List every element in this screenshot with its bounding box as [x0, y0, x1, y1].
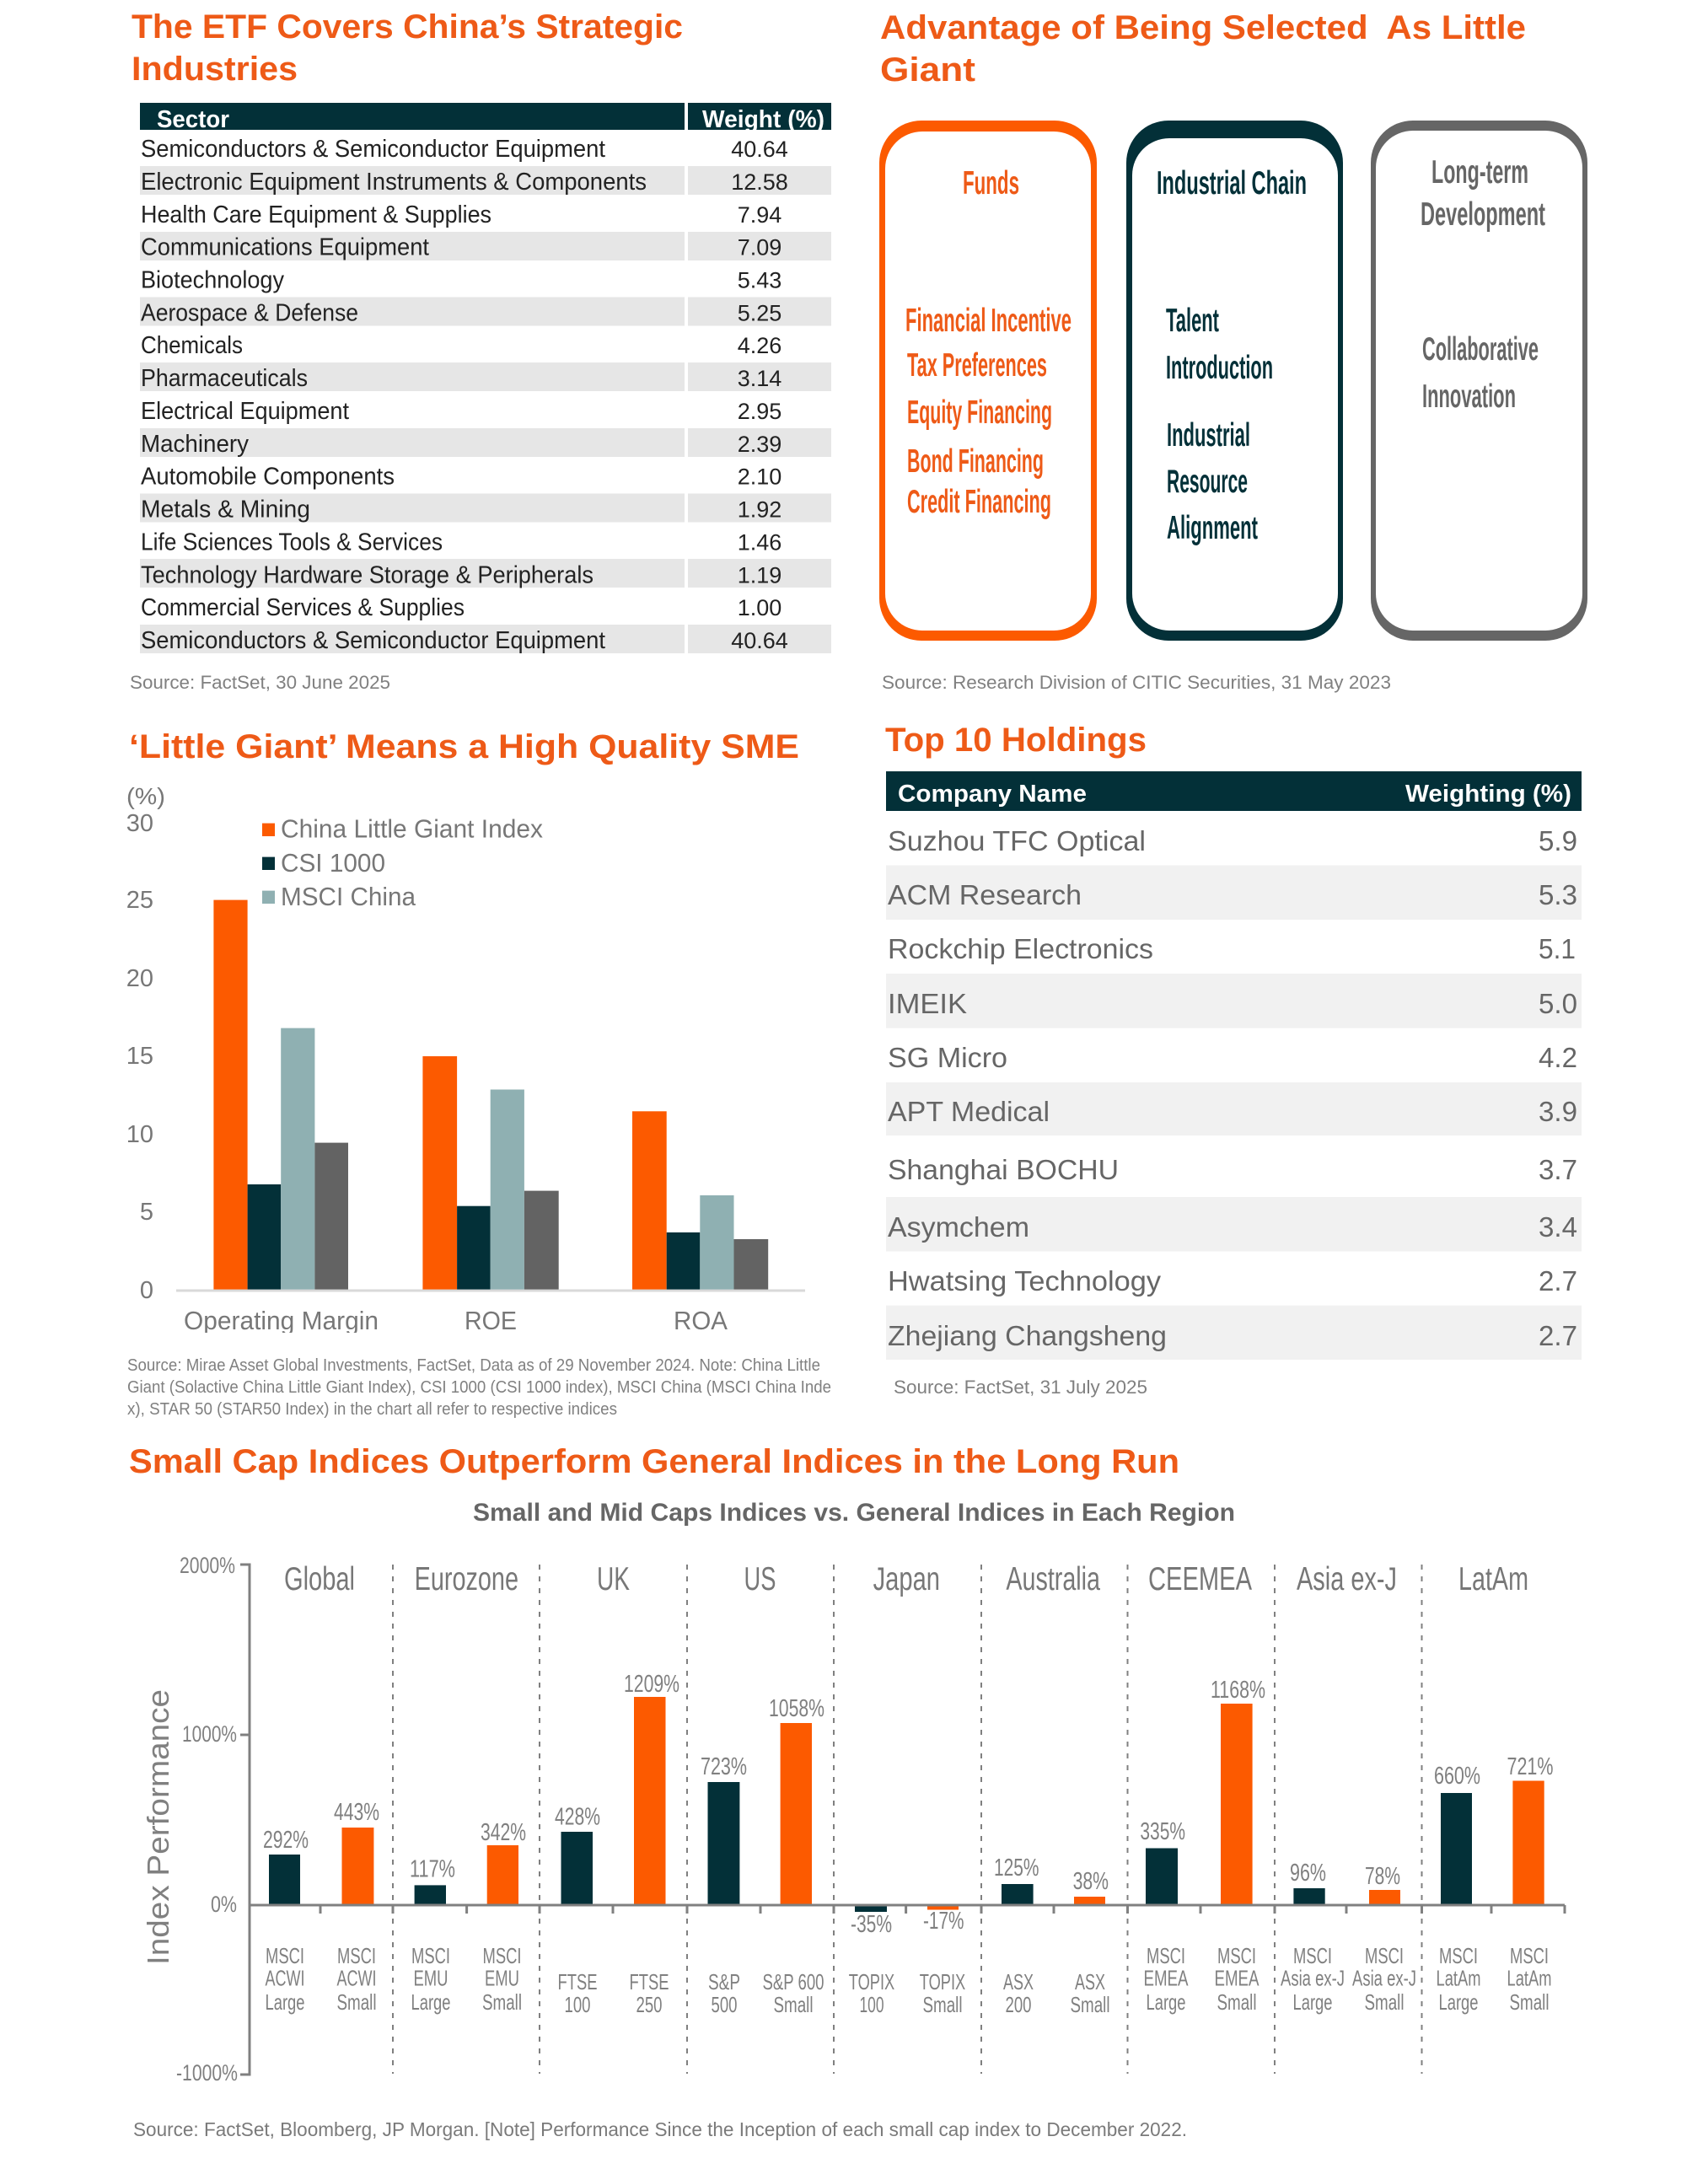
heading: small cap indices outperform: Small Cap Indices Outperform General Indices in the Long Run — [129, 1443, 1179, 1480]
table: holdings: Zhejiang Changsheng — [888, 1320, 1167, 1351]
value labels: 723% — [701, 1753, 747, 1780]
bar chart: margin, ROE, ROA: 30 — [126, 810, 153, 837]
index category labels: FTSE — [629, 1969, 669, 1994]
index category labels: MSCI — [1147, 1943, 1185, 1968]
heading: ETF covers strategic industries — [132, 8, 683, 88]
index category labels: LatAm — [1507, 1966, 1551, 1991]
table: sector weights: Sector — [157, 106, 229, 133]
card: long-term development: Collaborative — [1422, 331, 1539, 368]
table: holdings: Asymchem — [888, 1211, 1029, 1243]
index category labels: EMEA — [1143, 1966, 1189, 1991]
table: holdings: Shanghai BOCHU — [888, 1154, 1119, 1185]
index category labels: Small — [774, 1992, 813, 2017]
index category labels: MSCI — [266, 1943, 304, 1968]
region labels: CEEMEA — [1148, 1561, 1252, 1597]
table: holdings: 3.7 — [1539, 1154, 1577, 1185]
table: sector weights: 1.46 — [738, 529, 781, 555]
table: sector weights: Aerospace & Defense — [141, 299, 358, 326]
table: sector weights: Communications Equipment — [141, 234, 429, 261]
value labels: 1168% — [1211, 1677, 1265, 1704]
panel: sector weights — [130, 8, 831, 693]
card: funds: Equity Financing — [907, 395, 1052, 431]
index category labels: EMEA — [1214, 1966, 1260, 1991]
table: holdings: Weighting (%) — [1405, 781, 1571, 808]
table: sector weights: Commercial Services & Supplies — [141, 594, 465, 621]
value labels: -17% — [923, 1908, 964, 1935]
card: funds: Bond Financing — [907, 443, 1044, 480]
region labels: Global — [284, 1561, 355, 1597]
value labels: 125% — [994, 1855, 1039, 1882]
table: sector weights: Electronic Equipment Instruments & Components — [141, 169, 647, 196]
value labels: 117% — [410, 1856, 455, 1883]
table: sector weights: Automobile Components — [141, 464, 395, 491]
bar chart: margin, ROE, ROA: 0 — [140, 1277, 153, 1304]
index category labels: 250 — [636, 1992, 663, 2017]
table: holdings: Company Name — [898, 781, 1087, 808]
table: sector weights: Technology Hardware Storage & Peripherals — [141, 561, 594, 588]
table: holdings: 2.7 — [1539, 1320, 1577, 1351]
index category labels: ASX — [1003, 1969, 1034, 1994]
table: sector weights: 1.19 — [738, 562, 781, 588]
table: holdings: ACM Research — [888, 879, 1082, 910]
card: long-term development: Innovation — [1422, 378, 1516, 415]
legend — [262, 814, 543, 911]
chart subtitle: Small and Mid Caps Indices vs. General Indices in Each Region — [473, 1499, 1235, 1527]
index category labels: MSCI — [1217, 1943, 1256, 1968]
table: holdings: IMEIK — [888, 988, 967, 1019]
region labels: Australia — [1006, 1561, 1100, 1597]
index category labels: MSCI — [1439, 1943, 1478, 1968]
table: sector weights: 40.64 — [731, 137, 788, 162]
heading: advantage of being selected: Giant — [880, 51, 975, 89]
table: holdings: 3.9 — [1539, 1096, 1577, 1127]
value labels — [263, 1671, 1553, 1938]
region labels: US — [744, 1561, 776, 1597]
region labels: Eurozone — [415, 1561, 518, 1597]
table: sector weights — [140, 103, 831, 654]
source note: SME chart — [127, 1356, 831, 1419]
zero axis — [250, 1905, 1565, 1914]
region labels: Asia ex-J — [1297, 1561, 1397, 1597]
table: sector weights: 3.14 — [738, 366, 781, 391]
table: holdings — [886, 771, 1582, 1360]
index category labels: Small — [1217, 1989, 1256, 2015]
bar chart: margin, ROE, ROA: ROE — [465, 1306, 517, 1335]
index category labels: Asia ex-J — [1281, 1966, 1345, 1991]
index category labels: ACWI — [337, 1966, 376, 1991]
card: funds: Financial Incentive — [905, 303, 1072, 339]
value labels: 96% — [1290, 1860, 1326, 1887]
index category labels: Large — [1438, 1989, 1479, 2015]
heading: top 10 holdings: Top 10 Holdings — [885, 722, 1147, 759]
value labels: 1209% — [624, 1671, 679, 1698]
index category labels: Large — [1147, 1989, 1185, 2015]
index category labels: S&P 600 — [762, 1969, 824, 1994]
table: sector weights: Health Care Equipment & Supplies — [141, 201, 491, 228]
table: holdings: Rockchip Electronics — [888, 933, 1153, 964]
heading: ETF covers strategic industries: Industries — [132, 51, 298, 88]
table: holdings: SG Micro — [888, 1042, 1007, 1073]
table: sector weights: Machinery — [141, 431, 249, 458]
index category labels: 100 — [860, 1992, 884, 2017]
heading: advantage of being selected — [880, 9, 1526, 89]
card: long-term development: Long-term — [1431, 154, 1528, 191]
value labels: 721% — [1507, 1753, 1553, 1780]
index category labels: Large — [411, 1989, 450, 2015]
value labels: 38% — [1073, 1868, 1109, 1895]
index category labels: MSCI — [337, 1943, 376, 1968]
bar chart: margin, ROE, ROA: (%) — [126, 783, 165, 809]
table: sector weights: 12.58 — [731, 169, 788, 195]
panel: high quality SME chart — [126, 728, 831, 1419]
table: sector weights: 1.00 — [738, 595, 781, 620]
card: industrial chain: Industrial Chain — [1157, 165, 1307, 201]
table: holdings: 2.7 — [1539, 1265, 1577, 1296]
value labels: 292% — [263, 1827, 309, 1854]
source note: sector table: Source: FactSet, 30 June 2025 — [130, 672, 390, 693]
y axis: 2000% — [180, 1553, 235, 1578]
value labels: 1058% — [769, 1695, 824, 1722]
index category labels: TOPIX — [920, 1969, 965, 1994]
table: sector weights: Semiconductors & Semiconductor Equipment — [141, 627, 605, 654]
y axis: Index Performance — [141, 1689, 175, 1965]
table: holdings: Hwatsing Technology — [888, 1265, 1162, 1296]
table: sector weights: Life Sciences Tools & Services — [141, 529, 443, 556]
table: holdings: 5.0 — [1539, 988, 1577, 1019]
table: sector weights: Semiconductors & Semiconductor Equipment — [141, 136, 605, 163]
y axis — [141, 1553, 250, 2086]
value labels: 335% — [1140, 1818, 1185, 1845]
region labels: Japan — [873, 1561, 940, 1597]
table: sector weights: Weight (%) — [702, 106, 824, 133]
index category labels: 200 — [1005, 1992, 1032, 2017]
table: sector weights: 5.43 — [738, 268, 781, 293]
index category labels: LatAm — [1437, 1966, 1480, 1991]
heading: little giant means high quality SME: ‘Little Giant’ Means a High Quality SME — [129, 728, 799, 765]
table: sector weights: Pharmaceuticals — [141, 365, 308, 392]
card: long-term development — [1371, 121, 1587, 641]
index category labels: 100 — [565, 1992, 590, 2017]
table: sector weights: 5.25 — [738, 300, 781, 325]
y axis: 0% — [211, 1892, 237, 1917]
table: sector weights: 2.10 — [738, 464, 781, 490]
value labels: 660% — [1434, 1763, 1480, 1790]
bar chart: margin, ROE, ROA: 20 — [126, 965, 153, 992]
index category labels: MSCI — [1510, 1943, 1549, 1968]
index category labels: EMU — [485, 1966, 519, 1991]
region labels: UK — [597, 1561, 630, 1597]
bar chart: margin, ROE, ROA: 5 — [140, 1199, 153, 1226]
index category labels — [265, 1943, 1551, 2017]
region labels — [284, 1561, 1528, 1597]
panel: small cap outperformance — [129, 1443, 1565, 2140]
table: sector weights: Chemicals — [141, 332, 243, 359]
table: sector weights: Biotechnology — [141, 266, 284, 293]
card: industrial chain: Introduction — [1166, 350, 1273, 386]
table: sector weights: 4.26 — [738, 333, 781, 358]
card: industrial chain: Industrial — [1167, 417, 1250, 454]
y axis: -1000% — [176, 2060, 238, 2086]
source note: SME chart: x), STAR 50 (STAR50 Index) in the chart all refer to respective indices — [127, 1400, 617, 1419]
y axis: 1000% — [182, 1721, 237, 1747]
value labels: 78% — [1365, 1863, 1400, 1890]
card: funds — [879, 121, 1097, 641]
index category labels: MSCI — [1293, 1943, 1332, 1968]
table: sector weights: 7.09 — [738, 235, 781, 260]
legend: China Little Giant Index — [281, 814, 543, 844]
value labels: 342% — [481, 1819, 526, 1846]
index category labels: MSCI — [1365, 1943, 1404, 1968]
index category labels: Small — [1364, 1989, 1405, 2015]
legend: MSCI China — [281, 882, 416, 911]
index category labels: Asia ex-J — [1352, 1966, 1416, 1991]
source note: small cap chart: Source: FactSet, Bloomberg, JP Morgan. [Note] Performance Since the Inception of each small cap index to December 2022. — [133, 2118, 1187, 2140]
table: sector weights: Electrical Equipment — [141, 398, 349, 425]
index category labels: Small — [1071, 1992, 1109, 2017]
index category labels: MSCI — [411, 1943, 450, 1968]
card: industrial chain — [1126, 121, 1343, 641]
bar chart: margin, ROE, ROA — [126, 783, 805, 1341]
index category labels: FTSE — [558, 1969, 597, 1994]
bar chart: margin, ROE, ROA: 25 — [126, 887, 153, 914]
card: industrial chain: Talent — [1166, 303, 1219, 339]
source note: advantage panel: Source: Research Division of CITIC Securities, 31 May 2023 — [882, 672, 1391, 693]
index category labels: ASX — [1075, 1969, 1105, 1994]
bars — [269, 1697, 1544, 1912]
panel: top 10 holdings — [885, 722, 1582, 1398]
panel: advantage of little giant — [879, 9, 1587, 693]
value labels: 428% — [555, 1804, 600, 1831]
table: holdings: 5.9 — [1539, 825, 1577, 856]
table: holdings: 5.3 — [1539, 879, 1577, 910]
table: holdings: 3.4 — [1539, 1211, 1577, 1243]
table: holdings: Suzhou TFC Optical — [888, 825, 1146, 856]
region labels: LatAm — [1458, 1561, 1528, 1597]
table: sector weights: Metals & Mining — [141, 496, 310, 523]
source note: holdings: Source: FactSet, 31 July 2025 — [894, 1377, 1147, 1398]
table: sector weights: 7.94 — [738, 202, 781, 228]
bar chart: margin, ROE, ROA: Operating Margin — [184, 1306, 379, 1335]
bar chart: margin, ROE, ROA: 15 — [126, 1043, 153, 1070]
heading: advantage of being selected: Advantage of Being Selected As Little — [880, 9, 1526, 46]
index category labels: ACWI — [265, 1966, 305, 1991]
heading: ETF covers strategic industries: The ETF Covers China’s Strategic — [132, 8, 683, 46]
card: funds: Tax Preferences — [907, 347, 1047, 384]
table: sector weights: 2.39 — [738, 432, 781, 457]
table: holdings: APT Medical — [888, 1096, 1050, 1127]
index category labels: MSCI — [482, 1943, 521, 1968]
index category labels: Small — [922, 1992, 963, 2017]
legend: CSI 1000 — [281, 848, 385, 878]
card: industrial chain: Alignment — [1167, 510, 1258, 546]
index category labels: Small — [482, 1989, 522, 2015]
index category labels: S&P — [708, 1969, 740, 1994]
table: sector weights: 1.92 — [738, 497, 781, 523]
card: funds: Credit Financing — [907, 484, 1051, 520]
source note: SME chart: Source: Mirae Asset Global Investments, FactSet, Data as of 29 November 2024. Note: China Little — [127, 1356, 820, 1375]
card: funds: Funds — [963, 165, 1019, 201]
value labels: 443% — [334, 1799, 379, 1826]
index category labels: Large — [1293, 1989, 1332, 2015]
index category labels: TOPIX — [849, 1969, 894, 1994]
bar chart: regional index performance — [141, 1553, 1565, 2086]
table: holdings: 4.2 — [1539, 1042, 1577, 1073]
index category labels: Large — [265, 1989, 305, 2015]
index category labels: EMU — [413, 1966, 448, 1991]
index category labels: Small — [1509, 1989, 1550, 2015]
card: long-term development: Development — [1421, 196, 1545, 233]
table: sector weights: 2.95 — [738, 399, 781, 424]
bar chart: margin, ROE, ROA: ROA — [674, 1306, 728, 1335]
table: sector weights: 40.64 — [731, 628, 788, 653]
table: holdings: 5.1 — [1539, 933, 1576, 964]
bar chart: margin, ROE, ROA: 10 — [126, 1121, 153, 1148]
card: industrial chain: Resource — [1167, 464, 1248, 500]
index category labels: Small — [337, 1989, 376, 2015]
index category labels: 500 — [712, 1992, 737, 2017]
source note: SME chart: Giant (Solactive China Little Giant Index), CSI 1000 (CSI 1000 index), MSCI China (MSCI China Inde — [127, 1378, 831, 1397]
value labels: -35% — [851, 1911, 892, 1938]
